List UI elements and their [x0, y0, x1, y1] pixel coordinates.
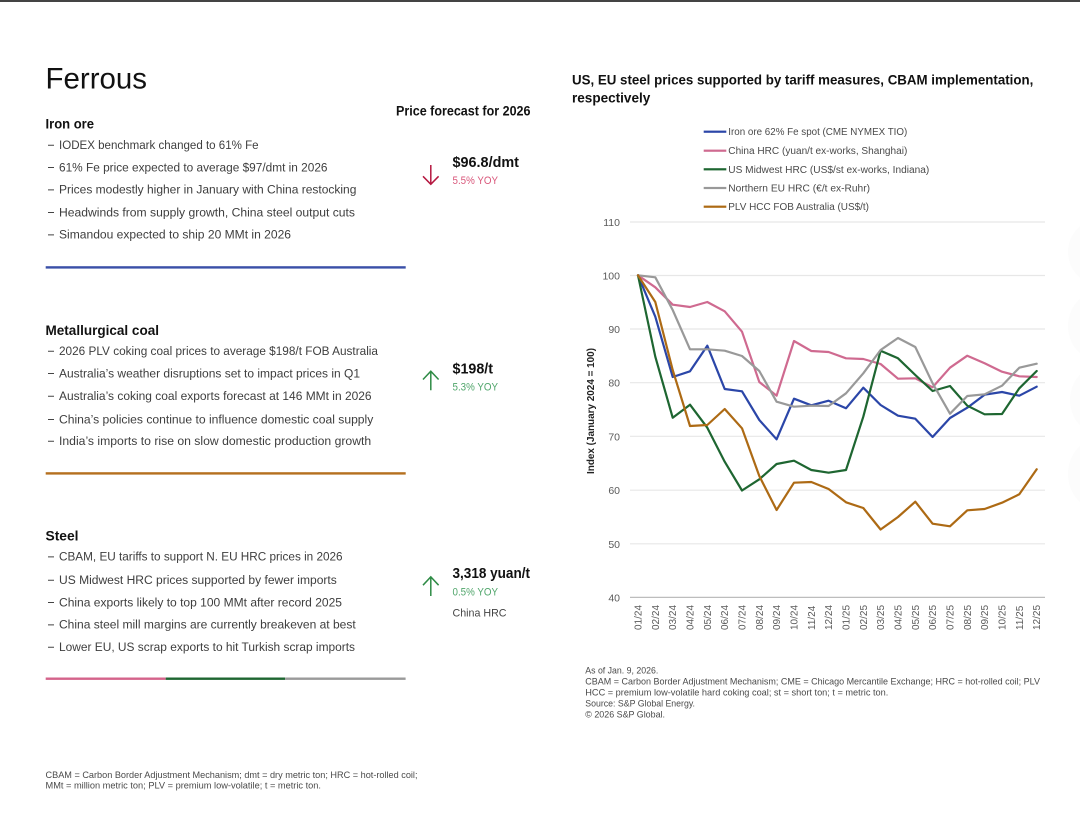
y axis labels: 110 — [603, 217, 620, 229]
bullet list: iron ore: Prices modestly higher in January with China restocking — [59, 183, 356, 197]
forecast change: steel: 0.5% YOY — [452, 586, 499, 598]
chart notes and source: HCC = premium low-volatile hard coking coal; st = short ton; t = metric ton. — [585, 687, 888, 698]
x axis labels — [634, 605, 1043, 630]
x axis labels: 02/25 — [859, 605, 870, 630]
x axis labels: 09/25 — [980, 605, 991, 630]
footnote: abbreviations: CBAM = Carbon Border Adjustment Mechanism; dmt = dry metric ton; HRC = hot-rolled coil; — [46, 769, 418, 780]
footnote: abbreviations: MMt = million metric ton; PLV = premium low-volatile; t = metric ton. — [46, 780, 321, 791]
forecast change: iron ore: 5.5% YOY — [452, 175, 499, 187]
x axis labels: 09/24 — [772, 605, 783, 630]
x axis labels: 08/25 — [963, 605, 974, 630]
panel: steel — [46, 528, 530, 680]
heading: price forecast: Price forecast for 2026 — [396, 104, 531, 119]
x axis labels: 02/24 — [651, 605, 662, 630]
icon: up arrow — [423, 371, 439, 390]
chart notes and source: © 2026 S&P Global. — [585, 708, 665, 719]
forecast price: metallurgical coal: $198/t — [452, 361, 493, 377]
x axis labels: 06/24 — [720, 605, 731, 630]
y axis labels — [602, 217, 620, 604]
forecast change: metallurgical coal: 5.3% YOY — [452, 382, 499, 394]
x axis labels: 04/25 — [894, 605, 904, 630]
forecast label: China HRC: China HRC — [452, 608, 507, 620]
series: iron ore — [638, 275, 1037, 439]
y axis labels: 40 — [608, 592, 620, 604]
bullet list: metallurgical coal: Australia’s weather disruptions set to impact prices in Q1 — [59, 366, 360, 380]
icon: down arrow — [423, 165, 439, 184]
y axis labels: 50 — [608, 539, 620, 551]
chart legend: Northern EU HRC (€/t ex-Ruhr) — [728, 184, 870, 194]
chart notes and source — [585, 664, 1041, 719]
bullet list: metallurgical coal: 2026 PLV coking coal prices to average $198/t FOB Australia — [59, 344, 378, 358]
bullet list: metallurgical coal: India’s imports to rise on slow domestic production growth — [59, 434, 371, 448]
series: PLV HCC — [638, 275, 1037, 530]
forecast price: steel: 3,318 yuan/t — [452, 566, 530, 582]
bullet list: iron ore: IODEX benchmark changed to 61% Fe — [59, 138, 259, 152]
y axis labels: 80 — [608, 378, 620, 390]
x axis labels: 08/24 — [755, 605, 766, 630]
bullet list: steel: US Midwest HRC prices supported by fewer imports — [59, 573, 337, 587]
heading: steel: Steel — [46, 528, 78, 544]
chart notes and source: Source: S&P Global Energy. — [585, 698, 695, 709]
chart legend: US Midwest HRC (US$/st ex-works, Indiana) — [728, 165, 929, 176]
chart legend — [704, 127, 929, 213]
rule: steel tricolor — [46, 678, 406, 680]
panel: iron ore — [46, 116, 519, 269]
forecast price: iron ore: $96.8/dmt — [452, 155, 519, 171]
panel: metallurgical coal — [46, 322, 499, 475]
chart notes and source: As of Jan. 9, 2026. — [585, 664, 658, 675]
chart legend: China HRC (yuan/t ex-works, Shanghai) — [728, 146, 907, 157]
heading: metallurgical coal: Metallurgical coal — [46, 322, 159, 338]
bullet list: iron ore — [48, 138, 356, 242]
y axis labels: 60 — [608, 485, 620, 497]
bullet list: steel — [48, 550, 356, 654]
chart legend: PLV HCC FOB Australia (US$/t) — [728, 202, 869, 213]
y axis labels: 70 — [608, 431, 620, 443]
series: China HRC — [638, 275, 1037, 396]
x axis labels: 04/24 — [686, 605, 696, 630]
bullet list: steel: China exports likely to top 100 MMt after record 2025 — [59, 595, 342, 609]
series: Northern EU HRC — [638, 275, 1037, 414]
rule: metallurgical coal — [46, 472, 406, 475]
x axis labels: 01/25 — [842, 605, 852, 630]
x axis labels: 10/25 — [998, 605, 1008, 630]
title: Ferrous — [46, 62, 147, 96]
chart legend: Iron ore 62% Fe spot (CME NYMEX TIO) — [728, 127, 907, 138]
footnote: abbreviations — [46, 769, 418, 791]
bullet list: steel: China steel mill margins are currently breakeven at best — [59, 618, 356, 632]
bullet list: steel: CBAM, EU tariffs to support N. EU HRC prices in 2026 — [59, 550, 343, 564]
rule: iron ore — [46, 266, 406, 269]
bullet list: iron ore: 61% Fe price expected to average $97/dmt in 2026 — [59, 160, 328, 174]
bullet list: metallurgical coal: Australia’s coking coal exports forecast at 146 MMt in 2026 — [59, 389, 372, 403]
y axis labels: 90 — [608, 324, 620, 336]
chart title: US, EU steel prices supported by tariff measures, CBAM implementation, — [572, 72, 1033, 88]
x axis labels: 06/25 — [928, 605, 939, 630]
x axis labels: 05/25 — [911, 605, 922, 630]
bullet list: iron ore: Simandou expected to ship 20 MMt in 2026 — [59, 228, 291, 242]
series: US Midwest HRC — [638, 275, 1037, 490]
x axis labels: 07/25 — [946, 605, 956, 630]
x axis labels: 01/24 — [634, 605, 644, 630]
y axis labels: 100 — [602, 270, 620, 282]
x axis labels: 03/24 — [668, 605, 679, 630]
line chart — [586, 217, 1045, 630]
x axis labels: 10/24 — [790, 605, 800, 630]
x axis labels: 05/24 — [703, 605, 714, 630]
bullet list: metallurgical coal — [48, 344, 378, 448]
x axis labels: 11/24 — [807, 605, 818, 630]
bullet list: iron ore: Headwinds from supply growth, China steel output cuts — [59, 205, 355, 219]
chart title — [572, 72, 1033, 105]
icon: up arrow — [423, 577, 439, 596]
x axis labels: 12/24 — [824, 605, 835, 630]
x axis labels: 11/25 — [1015, 605, 1026, 630]
chart notes and source: CBAM = Carbon Border Adjustment Mechanism; CME = Chicago Mercantile Exchange; HRC = hot-rolled coil; PLV — [585, 675, 1041, 686]
x axis labels: 12/25 — [1032, 605, 1043, 630]
bullet list: steel: Lower EU, US scrap exports to hit Turkish scrap imports — [59, 640, 355, 654]
y axis title: Index (January 2024 = 100) — [586, 348, 597, 474]
bullet list: metallurgical coal: China’s policies continue to influence domestic coal supply — [59, 412, 374, 426]
x axis labels: 07/24 — [738, 605, 748, 630]
chart title: respectively — [572, 89, 650, 105]
x axis labels: 03/25 — [876, 605, 887, 630]
heading: iron ore: Iron ore — [46, 116, 94, 132]
